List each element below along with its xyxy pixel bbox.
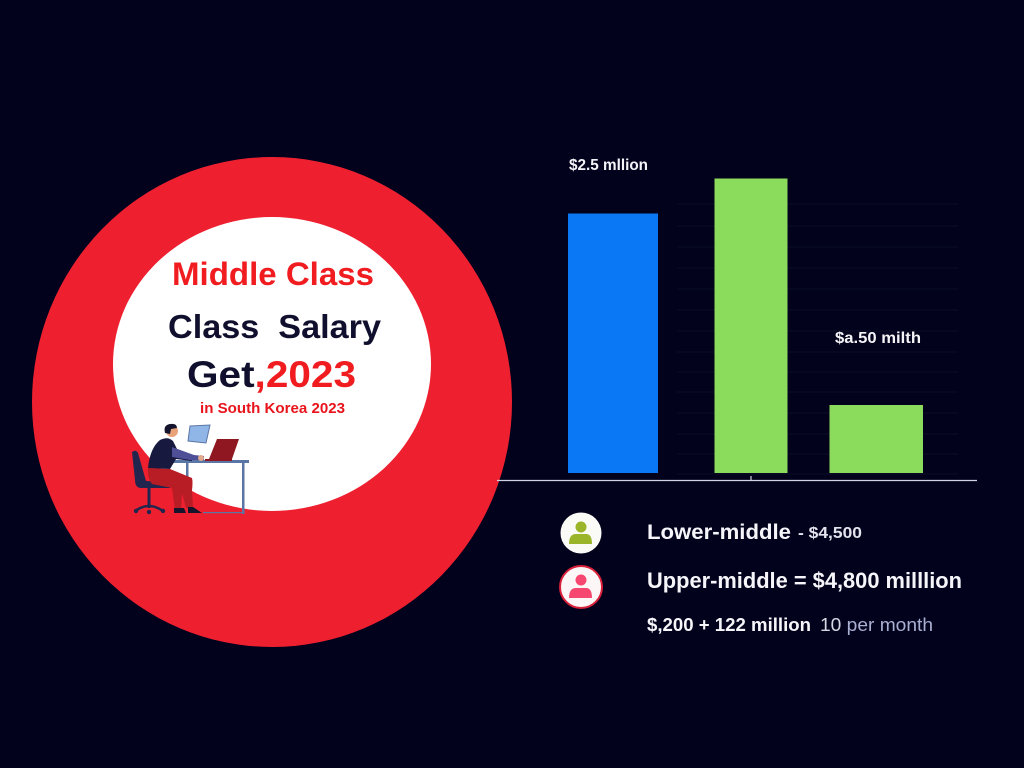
desk [170, 460, 249, 514]
bar: blue [568, 214, 658, 473]
legend value: lower-middle: - $4,500 [798, 525, 862, 542]
red outer circle [32, 157, 512, 647]
head [166, 425, 178, 437]
hand [198, 455, 204, 461]
laptop [205, 439, 239, 461]
monitor [188, 425, 210, 443]
title line: Get, 2023: Get,2023 [187, 354, 356, 395]
grid lines [677, 204, 958, 474]
bar chart [497, 157, 977, 480]
subtitle: in South Korea 2023 [200, 400, 345, 417]
icon: upper-middle person [560, 566, 602, 608]
chair [132, 451, 170, 514]
torso [148, 438, 192, 469]
value label: short green bar: $a.50 milth [835, 330, 921, 347]
hair [165, 424, 177, 434]
legend text: lower-middle: Lower-middle [647, 521, 791, 544]
arm [172, 447, 204, 460]
range text: $,200 + 122 million [647, 615, 811, 635]
bar: short green [830, 405, 923, 473]
bar: tall green [714, 178, 788, 473]
legend text: upper-middle: Upper-middle = $4,800 milllion [647, 568, 962, 593]
per month text: 10 per month [820, 615, 933, 635]
shoes [174, 507, 202, 513]
white inner circle [113, 217, 431, 511]
value label: blue bar: $2.5 mllion [569, 157, 648, 174]
illustration: person at desk [132, 424, 249, 514]
legend [560, 512, 962, 635]
title line: Middle Class: Middle Class [172, 256, 374, 292]
title line: Class Salary: Class Salary [168, 308, 382, 345]
axis [497, 476, 977, 480]
icon: lower-middle person [560, 512, 602, 554]
title [168, 256, 382, 417]
legs [148, 468, 193, 510]
